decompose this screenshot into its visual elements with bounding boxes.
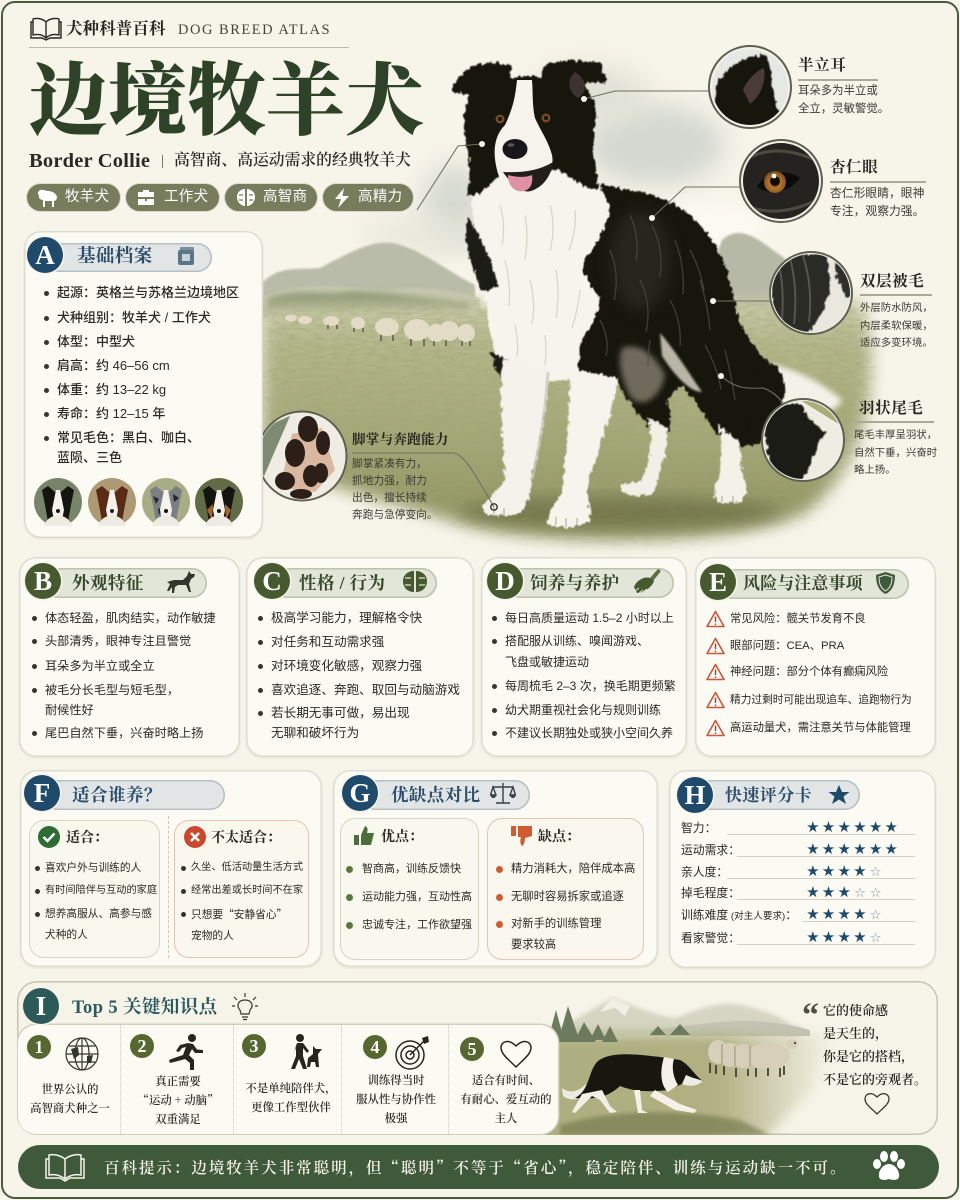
point 5: 适合有时间、: [472, 1072, 540, 1088]
tip bar: [18, 1145, 939, 1189]
heading A: [26, 236, 212, 274]
callout: paws: 抓地力强，耐力: [352, 475, 427, 487]
icon: person with dog: [287, 1034, 323, 1070]
pros list: [346, 862, 472, 931]
icon: open book: [45, 1153, 85, 1182]
rating: affection: ★: [822, 862, 835, 880]
panel I: top 5 key points: [17, 981, 938, 1135]
cons card: [487, 818, 644, 960]
tag: working dog: 工作犬: [164, 189, 208, 205]
callout: almond eyes: 杏仁形眼睛，眼神: [830, 186, 924, 200]
appearance list: 头部清秀，眼神专注且警觉: [45, 634, 191, 648]
callout: feathered tail: 羽状尾毛: [859, 400, 923, 417]
rating: shedding: [681, 883, 915, 903]
callout: double coat: 双层被毛: [860, 273, 924, 290]
callout: paws: [352, 432, 449, 521]
point 4: 训练得当时: [368, 1072, 424, 1088]
rating: intelligence: ★: [822, 818, 835, 836]
rating: exercise need: ★: [806, 840, 820, 858]
icon: target: [395, 1036, 429, 1070]
heading E: 风险与注意事项: [743, 574, 863, 593]
care list: 飞盘或敏捷运动: [505, 655, 589, 669]
appearance list: 耐候性好: [45, 703, 94, 717]
callout: paws: 出色，擅长持续: [352, 492, 427, 504]
rating: intelligence: ★: [806, 818, 820, 836]
rating: training difficulty: [681, 905, 915, 925]
brand name: 犬种科普百科: [66, 19, 166, 38]
dog far hind leg: [612, 355, 671, 496]
risk row 5: [706, 720, 911, 736]
rating: affection: ☆: [870, 865, 881, 880]
callout: double coat: 内层柔软保暖，: [860, 320, 933, 332]
point 4: 极强: [385, 1110, 407, 1126]
rating: intelligence: ★: [885, 818, 898, 836]
heading C: [253, 562, 437, 600]
risk row 1: 常见风险：髋关节发育不良: [730, 613, 866, 625]
risk row 1: [706, 610, 866, 628]
rating: exercise need: [681, 840, 915, 860]
main illustration: landscape, dog, callouts and inset circles: [263, 45, 883, 552]
suitable card: [29, 820, 160, 958]
heading F: F: [34, 778, 50, 808]
cons list: 要求较高: [511, 939, 556, 951]
tip text: 百科提示：边境牧羊犬非常聪明，但“聪明”不等于“省心”，稳定陪伴、训练与运动缺一不可。: [104, 1156, 847, 1178]
pros heading: 优点：: [381, 830, 423, 845]
rating: affection: [681, 862, 915, 882]
cons list: 无聊时容易拆家或追逐: [511, 891, 624, 903]
heading I: I: [36, 991, 46, 1021]
risk row 5: 高运动量犬，需注意关节与体能管理: [730, 722, 911, 734]
inset: feathered tail: [762, 399, 845, 482]
rating: intelligence: 智力：: [681, 821, 716, 835]
point 5: 主人: [495, 1110, 517, 1126]
risk row 2: 眼部问题：CEA、PRA: [730, 640, 844, 652]
callout: double coat: [860, 272, 933, 349]
callout: almond eyes: [830, 158, 926, 218]
unsuitable list: 久坐、低活动量生活方式: [191, 862, 303, 873]
point 5: [448, 1025, 558, 1134]
title: 边境牧羊犬: [29, 59, 424, 146]
icon: brain: [403, 571, 427, 592]
icon: scales: [490, 783, 516, 804]
rating: training difficulty: ★: [853, 905, 867, 923]
icon: quote heart: [864, 1092, 890, 1116]
suitable list: 喜欢户外与训练的人: [45, 862, 141, 874]
heading F: [23, 774, 225, 812]
care list: 每日高质量运动 1.5–2 小时以上: [505, 611, 674, 625]
cons list: 对新手的训练管理: [511, 918, 601, 930]
suitable list: [35, 862, 157, 941]
point 1: [18, 1025, 120, 1134]
quote: 你是它的搭档，: [823, 1049, 914, 1064]
temperament list: [258, 611, 460, 740]
appearance list: 体态轻盈，肌肉结实，动作敏捷: [45, 611, 216, 625]
point 2: “运动 + 动脑”: [138, 1092, 218, 1108]
profile facts: 肩高：约 46–56 cm: [57, 358, 170, 373]
callout: paws: 奔跑与急停变向。: [352, 509, 438, 521]
rating: watchdog alertness: ★: [806, 928, 820, 946]
heading G: 优缺点对比: [391, 785, 480, 805]
temperament list: 无聊和破坏行为: [271, 726, 359, 740]
appearance list: 尾巴自然下垂，兴奋时略上扬: [45, 726, 203, 740]
subtitle: Border Collie: [29, 150, 150, 172]
rating: exercise need: 运动需求：: [681, 843, 740, 857]
point 2: 2: [138, 1036, 146, 1056]
heading C: C: [262, 566, 282, 596]
point 3: 不是单纯陪伴犬，: [245, 1080, 337, 1096]
rating: exercise need: ★: [853, 840, 867, 858]
inset: ear: [709, 46, 791, 128]
point 4: 4: [370, 1037, 380, 1057]
unsuitable list: 宠物的人: [191, 928, 234, 943]
inset: double coat: [770, 252, 852, 334]
header brand line: [29, 16, 349, 48]
unsuitable list: [181, 861, 303, 943]
suitable list: 有时间陪伴与互动的家庭: [45, 885, 157, 896]
panel E: risks: [695, 557, 936, 757]
heading A: 基础档案: [77, 247, 153, 267]
rating: affection: ★: [837, 862, 851, 880]
profile facts: 常见毛色：黑白、咖白、: [57, 430, 200, 445]
care list: [492, 611, 676, 740]
rating: shedding: ☆: [870, 886, 881, 901]
inset: paw pads: [258, 412, 346, 500]
point 1: 世界公认的: [42, 1081, 98, 1097]
callout lines and anchor dots: [352, 91, 783, 510]
point 4: [341, 1025, 448, 1134]
icon: dog silhouette: [167, 571, 195, 593]
rating: exercise need: ★: [822, 840, 835, 858]
pros list: 运动能力强，互动性高: [362, 891, 472, 903]
cons heading: 缺点：: [538, 830, 580, 845]
care list: 每周梳毛 2–3 次，换毛期更频繁: [505, 679, 676, 693]
heading H: [676, 776, 860, 814]
callout: feathered tail: 尾毛丰厚呈羽状，: [854, 430, 937, 441]
rating: training difficulty: 训练难度 (对主人要求)：: [681, 908, 797, 922]
tag: herding dog: [27, 184, 120, 211]
heading D: [486, 562, 674, 600]
callout: semi-erect ears: 耳朵多为半立或: [798, 85, 878, 97]
unsuitable list: 经常出差或长时间不在家: [191, 885, 303, 896]
point 5: 有耐心、爱互动的: [460, 1091, 552, 1107]
pros list: 忠诚专注，工作欲望强: [362, 919, 472, 931]
rating: affection: ★: [853, 862, 867, 880]
callout: almond eyes: 专注，观察力强。: [830, 204, 924, 218]
icon: thumb up: [354, 826, 374, 845]
rating: watchdog alertness: 看家警觉：: [681, 931, 740, 945]
point 2: 双重满足: [155, 1111, 201, 1127]
cons list: [496, 862, 635, 951]
suitable heading: 适合：: [66, 831, 108, 846]
rating: exercise need: ★: [885, 840, 898, 858]
rating: training difficulty: ★: [822, 905, 835, 923]
tag: high energy: 高精力: [358, 189, 402, 205]
rating: training difficulty: ☆: [870, 908, 881, 923]
quote: 它的使命感: [823, 1003, 888, 1018]
heading H: H: [684, 780, 706, 810]
pros list: 智商高，训练反馈快: [362, 863, 461, 875]
unsuitable heading: 不太适合：: [211, 831, 281, 846]
icon: paw: [872, 1151, 906, 1183]
quote mark: “: [802, 997, 819, 1034]
panel A: basic profile: [24, 231, 263, 538]
rating: intelligence: ★: [837, 818, 851, 836]
heading D: 饲养与养护: [530, 573, 620, 593]
callout: semi-erect ears: [798, 56, 889, 114]
rating: shedding: ★: [837, 883, 851, 901]
point 1: 高智商犬种之一: [30, 1100, 110, 1116]
point 5: 5: [468, 1039, 476, 1059]
profile facts: 蓝陨、三色: [57, 450, 122, 465]
icon: file folder: [178, 247, 194, 265]
subtitle: [29, 150, 411, 172]
rating: affection: ★: [806, 862, 820, 880]
care list: 不建议长期独处或狭小空间久养: [505, 726, 673, 740]
profile facts: 体型：中型犬: [57, 334, 135, 349]
risk row 4: [706, 692, 912, 708]
quote: 不是它的旁观者。: [823, 1072, 927, 1087]
flock of sheep: [285, 314, 475, 346]
temperament list: 对任务和互动需求强: [271, 635, 384, 649]
profile facts: [44, 285, 239, 465]
rating: watchdog alertness: ☆: [870, 931, 881, 946]
panel C: temperament: [246, 557, 474, 757]
tag: high intelligence: [225, 184, 317, 211]
callout: feathered tail: 自然下垂，兴奋时: [854, 448, 937, 458]
coat colour portraits: [34, 478, 243, 526]
callout: double coat: 外层防水防风，: [860, 303, 933, 314]
key points card: [18, 1025, 558, 1134]
risk row 3: 神经问题：部分个体有癫痫风险: [730, 666, 888, 678]
callout: almond eyes: 杏仁眼: [830, 159, 878, 176]
risk row 3: [706, 664, 888, 680]
appearance list: [32, 611, 216, 740]
heading G: G: [349, 778, 370, 808]
temperament list: 对环境变化敏感，观察力强: [271, 659, 422, 673]
appearance list: 耳朵多为半立或全立: [45, 659, 155, 673]
point 4: 服从性与协作性: [356, 1091, 436, 1107]
callout: feathered tail: [854, 400, 937, 476]
brand subtitle: DOG BREED ATLAS: [178, 22, 331, 38]
heading A: A: [35, 240, 55, 270]
icon: lightbulb: [231, 992, 259, 1022]
panel H: quick score card: [669, 770, 936, 968]
icon: heart: [500, 1039, 532, 1069]
rating: affection: 亲人度：: [681, 865, 728, 879]
heading D: D: [495, 566, 515, 596]
heading I: [23, 988, 273, 1024]
dog head: [452, 61, 606, 194]
icon: check: [38, 826, 60, 848]
heading B: [24, 562, 207, 600]
icon: shield: [876, 572, 895, 594]
callout: feathered tail: 略上扬。: [854, 465, 896, 476]
suitable list: 犬种的人: [45, 929, 88, 941]
heading G: [341, 774, 530, 812]
profile facts: 体重：约 13–22 kg: [57, 382, 166, 397]
profile facts: 起源：英格兰与苏格兰边境地区: [57, 285, 239, 300]
subtitle: 高智商、高运动需求的经典牧羊犬: [174, 152, 411, 169]
rating: exercise need: ★: [837, 840, 851, 858]
rating: intelligence: [681, 818, 915, 838]
temperament list: 若长期无事可做，易出现: [271, 706, 410, 720]
rating: watchdog alertness: [681, 928, 915, 948]
inset: almond eye: [740, 140, 822, 222]
heading E: [699, 563, 909, 601]
callout: semi-erect ears: 全立，灵敏警觉。: [798, 102, 889, 114]
landscape background: [263, 65, 903, 550]
rating: intelligence: ★: [853, 818, 867, 836]
dog front legs: [482, 352, 733, 527]
rating: training difficulty: ★: [837, 905, 851, 923]
care list: 搭配服从训练、嗅闻游戏、: [505, 634, 649, 648]
rating: watchdog alertness: ★: [853, 928, 867, 946]
rating: shedding: ★: [806, 883, 820, 901]
temperament list: 喜欢追逐、奔跑、取回与动脑游戏: [271, 683, 460, 697]
panel G: pros and cons: [333, 770, 658, 967]
quote: 是天生的，: [823, 1026, 888, 1041]
dog tail: [716, 318, 842, 446]
point 1: 1: [34, 1037, 44, 1057]
rating: watchdog alertness: ★: [822, 928, 835, 946]
heading E: E: [709, 567, 727, 597]
panel D: care: [481, 557, 687, 757]
care list: 幼犬期重视社会化与规则训练: [505, 703, 661, 717]
heading C: 性格 / 行为: [299, 573, 385, 593]
subtitle: |: [161, 153, 164, 169]
callout: paws: 脚掌与奔跑能力: [352, 432, 449, 447]
pros card: [340, 818, 479, 960]
unsuitable list: 只想要“安静省心”: [191, 907, 287, 922]
temperament list: 极高学习能力，理解格令快: [271, 611, 422, 625]
heading H: 快速评分卡: [725, 786, 812, 805]
rating: shedding: ★: [822, 883, 835, 901]
heading B: 外观特征: [72, 573, 144, 593]
callout: semi-erect ears: 半立耳: [798, 57, 846, 74]
cons list: 精力消耗大，陪伴成本高: [511, 863, 635, 875]
point 2: [120, 1025, 233, 1134]
callout: double coat: 适应多变环境。: [860, 338, 933, 349]
panel F: who it suits: [20, 770, 322, 967]
icon: cross: [184, 826, 206, 848]
icon: globe: [65, 1037, 99, 1071]
heading B: B: [34, 566, 52, 596]
unsuitable card: [174, 820, 309, 958]
dog white chest: [466, 165, 608, 381]
tag: high energy: [323, 184, 413, 211]
appearance list: 被毛分长毛型与短毛型，: [45, 683, 179, 697]
point 2: 真正需要: [155, 1073, 201, 1089]
tag: high intelligence: 高智商: [263, 189, 307, 205]
icon: open book: [30, 18, 62, 41]
tag: herding dog: 牧羊犬: [65, 189, 109, 205]
rating: shedding: 掉毛程度：: [681, 886, 740, 900]
icon: star: [828, 785, 850, 804]
callout: paws: 脚掌紧凑有力，: [352, 458, 427, 470]
rating: exercise need: ★: [869, 840, 882, 858]
suitable list: 想养高服从、高参与感: [45, 908, 152, 920]
dog near hind leg: [676, 348, 749, 503]
icon: runner: [168, 1033, 206, 1071]
tag: working dog: [126, 184, 219, 211]
profile facts: 寿命：约 12–15 年: [57, 406, 165, 421]
quote: [823, 999, 935, 1093]
heading I: Top 5 关键知识点: [72, 998, 218, 1018]
risk row 2: [706, 638, 844, 654]
rating: watchdog alertness: ★: [837, 928, 851, 946]
herding scene: [540, 981, 938, 1135]
point 3: 3: [250, 1036, 258, 1056]
heading F: 适合谁养？: [72, 785, 162, 805]
rating: intelligence: ★: [869, 818, 882, 836]
risk row 4: 精力过剩时可能出现追车、追跑物行为: [730, 694, 912, 706]
profile facts: 犬种组别：牧羊犬 / 工作犬: [57, 310, 211, 325]
rating: shedding: ☆: [854, 886, 866, 901]
rating: training difficulty: ★: [806, 905, 820, 923]
dog body: [576, 184, 760, 445]
point 3: 更像工作型伙伴: [251, 1099, 331, 1115]
point 3: [233, 1025, 341, 1134]
panel B: appearance: [19, 557, 240, 757]
icon: grooming brush: [634, 569, 661, 593]
icon: thumb down: [511, 826, 532, 846]
